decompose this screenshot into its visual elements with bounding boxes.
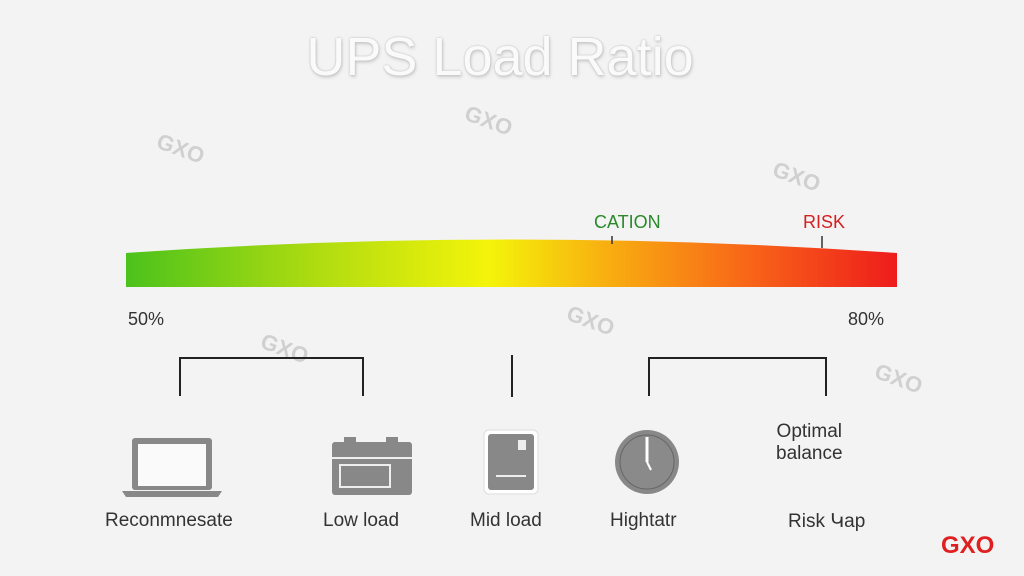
icon: laptop	[122, 438, 222, 497]
watermarks: GXO	[257, 328, 312, 369]
text: Mid load	[470, 510, 542, 531]
icon: clock	[615, 430, 679, 494]
watermarks: GXO	[153, 128, 208, 169]
title: UPS Load Ratio	[306, 27, 694, 87]
text: Hightatr	[610, 510, 677, 531]
watermarks: GXO	[461, 100, 516, 141]
text: Risk Կap	[788, 511, 865, 532]
brackets	[180, 358, 363, 396]
watermarks: GXO	[871, 358, 926, 399]
text: RISK	[803, 212, 845, 232]
text: balance	[776, 443, 843, 464]
logo: GXO	[941, 532, 994, 559]
watermarks: GXO	[563, 300, 618, 341]
text: Low load	[323, 510, 399, 531]
icon: battery	[332, 437, 412, 495]
text: 80%	[848, 309, 884, 329]
icon: mid device	[484, 430, 538, 494]
watermarks: GXO	[769, 156, 824, 197]
text: 50%	[128, 309, 164, 329]
text: Optimal	[777, 421, 842, 442]
labels: CATION	[594, 212, 661, 232]
text: Reconmnesate	[105, 510, 233, 531]
